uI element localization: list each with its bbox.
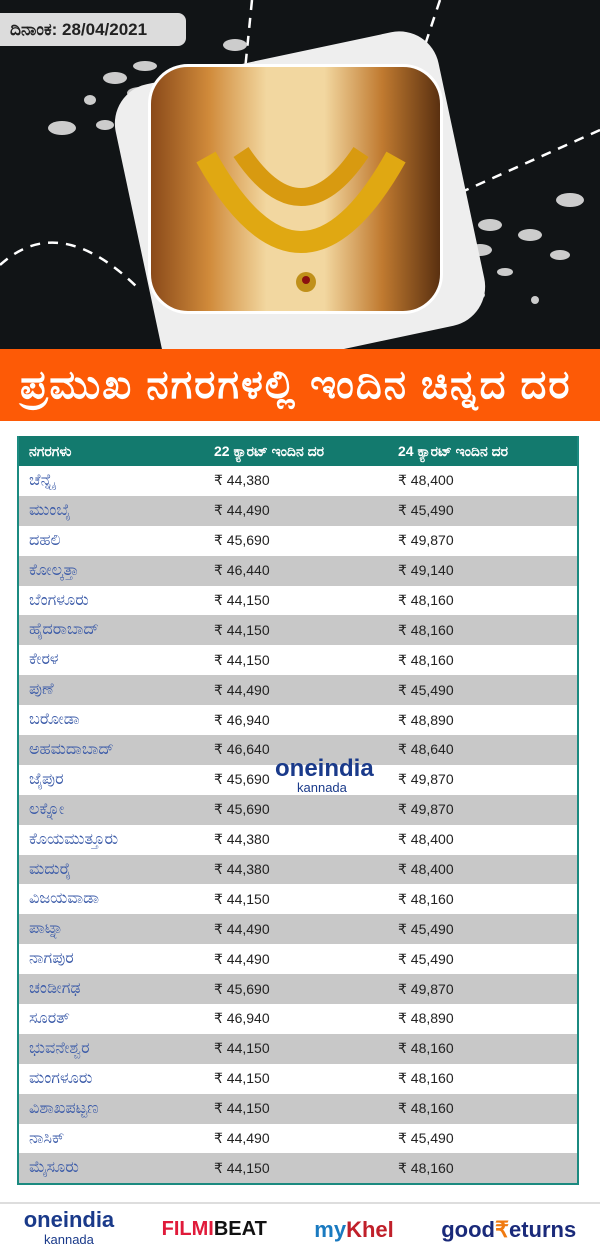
- table: gold rates: 22 ಕ್ಯಾರಟ್ ಇಂದಿನ ದರ: [214, 442, 324, 458]
- table: gold rates: [17, 436, 579, 1185]
- date label: ದಿನಾಂಕ: 28/04/2021: [10, 20, 147, 39]
- table: gold rates: ₹ 44,380: [214, 472, 270, 488]
- table: gold rates: ₹ 44,150: [214, 1100, 270, 1116]
- table: gold rates: ನಾಗಪುರ: [29, 950, 74, 967]
- table: gold rates: ₹ 46,640: [214, 741, 270, 757]
- table: gold rates: ಕೋಲ್ಕತ್ತಾ: [29, 562, 79, 579]
- table: gold rates: ₹ 44,150: [214, 622, 270, 638]
- watermark logo: [275, 755, 374, 795]
- table: gold rates: ಕೊಯಮುತ್ತೂರು: [29, 831, 118, 848]
- table: gold rates: ₹ 49,140: [398, 562, 454, 578]
- table: gold rates: ಸೂರತ್: [29, 1010, 70, 1027]
- table: gold rates: ₹ 45,490: [398, 951, 454, 967]
- logo: oneindia: kannada: [44, 1232, 94, 1246]
- table: gold rates: ನಾಸಿಕ್: [29, 1130, 64, 1147]
- table: gold rates: ₹ 44,150: [214, 592, 270, 608]
- table: gold rates: ಮದುರೈ: [29, 861, 71, 878]
- table: gold rates: ಭುವನೇಶ್ವರ: [29, 1040, 90, 1057]
- table: gold rates: ಅಹಮದಾಬಾದ್: [29, 741, 114, 758]
- table: gold rates: ₹ 48,160: [398, 622, 454, 638]
- table: gold rates: ಪುಣೆ: [29, 681, 54, 698]
- photo: gold necklace: [148, 64, 443, 314]
- table: gold rates: ₹ 48,400: [398, 831, 454, 847]
- table: gold rates: ಲಕ್ನೋ: [29, 801, 64, 818]
- table: gold rates: ₹ 45,490: [398, 682, 454, 698]
- table: gold rates: ₹ 48,160: [398, 1070, 454, 1086]
- table: gold rates: ₹ 48,160: [398, 592, 454, 608]
- table: gold rates: ₹ 46,940: [214, 712, 270, 728]
- table: gold rates: ₹ 45,490: [398, 502, 454, 518]
- table: gold rates: ವಿಜಯವಾಡಾ: [29, 890, 99, 907]
- table: gold rates: ₹ 44,150: [214, 891, 270, 907]
- table: gold rates: ಹೈದರಾಬಾದ್: [29, 621, 99, 638]
- table: gold rates: ₹ 45,490: [398, 1130, 454, 1146]
- table: gold rates: ₹ 48,400: [398, 861, 454, 877]
- table: gold rates: ₹ 48,160: [398, 1160, 454, 1176]
- table: gold rates: ₹ 49,870: [398, 981, 454, 997]
- date label: [0, 13, 186, 46]
- table: gold rates: ₹ 45,690: [214, 801, 270, 817]
- logo: oneindia: oneindia: [24, 1206, 114, 1232]
- table: gold rates: 24 ಕ್ಯಾರಟ್ ಇಂದಿನ ದರ: [398, 442, 508, 458]
- table: gold rates: ₹ 48,160: [398, 1100, 454, 1116]
- table: gold rates: ₹ 44,490: [214, 502, 270, 518]
- table: gold rates: ₹ 49,870: [398, 532, 454, 548]
- table: gold rates: ₹ 45,490: [398, 921, 454, 937]
- table: gold rates: ₹ 46,940: [214, 1010, 270, 1026]
- table: gold rates: ₹ 44,490: [214, 1130, 270, 1146]
- table: gold rates: ₹ 44,150: [214, 1040, 270, 1056]
- logo: mykhel: myKhel: [314, 1216, 394, 1242]
- photo frame: [107, 24, 493, 386]
- table: gold rates: ₹ 48,160: [398, 652, 454, 668]
- hero background: [0, 0, 600, 350]
- table: gold rates: ಜೈಪುರ: [29, 771, 64, 788]
- table: gold rates: ₹ 44,490: [214, 951, 270, 967]
- title banner: [0, 349, 600, 421]
- table: gold rates: ₹ 45,690: [214, 771, 270, 787]
- title banner: ಪ್ರಮುಖ ನಗರಗಳಲ್ಲಿ ಇಂದಿನ ಚಿನ್ನದ ದರ: [20, 363, 572, 407]
- table: gold rates: ₹ 44,490: [214, 921, 270, 937]
- table: gold rates: ₹ 44,490: [214, 682, 270, 698]
- table: gold rates: ₹ 48,400: [398, 472, 454, 488]
- table: gold rates: ₹ 45,690: [214, 981, 270, 997]
- logo: goodreturns: good₹eturns: [441, 1216, 576, 1242]
- table: gold rates: ಬರೋಡಾ: [29, 711, 80, 728]
- table: gold rates: ಕೇರಳ: [29, 651, 59, 668]
- table: gold rates: ₹ 44,150: [214, 1070, 270, 1086]
- table: gold rates: ಬೆಂಗಳೂರು: [29, 592, 89, 608]
- table: gold rates: ₹ 44,380: [214, 861, 270, 877]
- table: gold rates: ₹ 49,870: [398, 771, 454, 787]
- watermark logo: oneindia: [275, 755, 374, 782]
- table: gold rates: ₹ 46,440: [214, 562, 270, 578]
- watermark logo: kannada: [297, 780, 347, 795]
- table: gold rates: ₹ 48,890: [398, 1010, 454, 1026]
- table: gold rates: ಚಂಡೀಗಢ: [29, 980, 81, 997]
- logo: oneindia: [24, 1206, 114, 1246]
- table: gold rates: ₹ 48,160: [398, 891, 454, 907]
- table: gold rates: ₹ 48,640: [398, 741, 454, 757]
- table: gold rates: ದಹಲಿ: [29, 532, 61, 549]
- table: gold rates: ವಿಶಾಖಪಟ್ಟಣ: [29, 1100, 99, 1117]
- table: gold rates: ₹ 48,890: [398, 712, 454, 728]
- logo: filmibeat: FILMIBEAT: [162, 1218, 267, 1240]
- footer logos: [0, 1202, 600, 1255]
- table: gold rates: ₹ 44,150: [214, 652, 270, 668]
- table: gold rates: ₹ 49,870: [398, 801, 454, 817]
- table: gold rates: ನಗರಗಳು: [29, 442, 71, 458]
- table: gold rates: ಮೈಸೂರು: [29, 1159, 79, 1176]
- table: gold rates: ಮಂಗಳೂರು: [29, 1070, 92, 1087]
- table: gold rates: ಪಾಟ್ನಾ: [29, 920, 63, 937]
- table: gold rates: ಚೆನ್ನೈ: [29, 472, 55, 489]
- table: gold rates: ₹ 45,690: [214, 532, 270, 548]
- table: gold rates: ₹ 44,380: [214, 831, 270, 847]
- table: gold rates: ₹ 48,160: [398, 1040, 454, 1056]
- table: gold rates: ₹ 44,150: [214, 1160, 270, 1176]
- table: gold rates: ಮುಂಬೈ: [29, 502, 71, 519]
